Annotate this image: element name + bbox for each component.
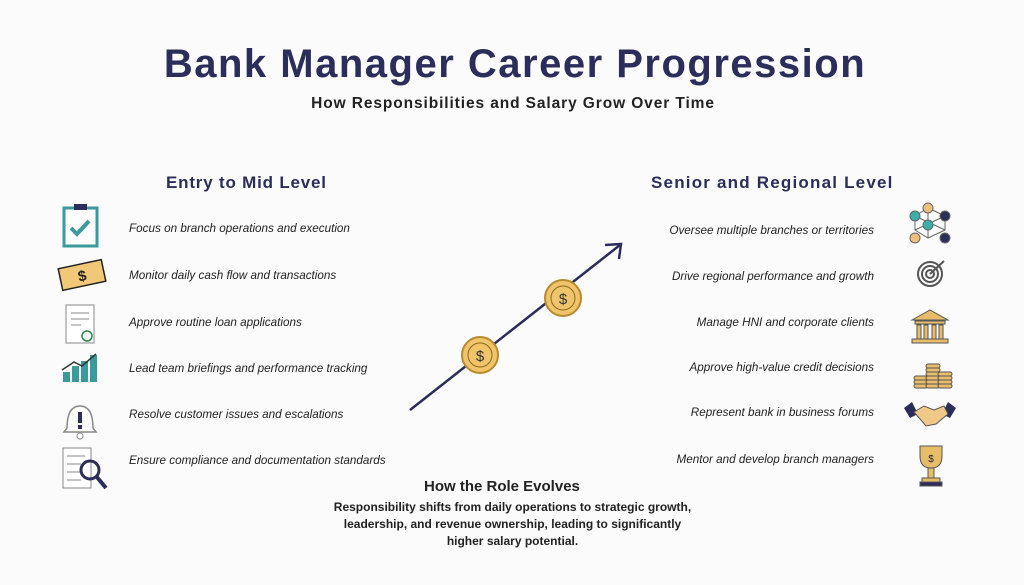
icon: bell	[64, 406, 96, 439]
right text items: Oversee multiple branches or territories	[669, 224, 874, 237]
coin 1: $	[476, 348, 485, 365]
heading: senior: Senior and Regional Level	[651, 173, 894, 192]
icon: network	[910, 203, 950, 243]
icon: growth chart	[62, 354, 97, 382]
left text items: Ensure compliance and documentation standards	[129, 454, 386, 467]
evolves text: Responsibility shifts from daily operations to strategic growth, leadership, and revenue ownership, leading to significantly higher salary potential.	[334, 500, 691, 548]
coin 2: $	[559, 291, 568, 308]
icon: trophy: $	[928, 454, 934, 465]
icon: coins	[914, 364, 952, 388]
icon: cash	[58, 260, 106, 290]
title: Bank Manager Career Progression	[164, 42, 866, 86]
left text items: Monitor daily cash flow and transactions	[129, 269, 336, 282]
subtitle: How Responsibilities and Salary Grow Over Time	[311, 95, 715, 112]
right text items: Represent bank in business forums	[691, 406, 874, 419]
heading: entry: Entry to Mid Level	[166, 173, 327, 192]
icon: bank	[912, 310, 948, 343]
right text items: Mentor and develop branch managers	[676, 453, 874, 466]
right text items	[669, 224, 874, 466]
left text items: Resolve customer issues and escalations	[129, 408, 343, 421]
icon: checklist magnifier	[63, 448, 106, 488]
evolves heading: How the Role Evolves	[424, 478, 580, 495]
icon: target	[918, 261, 944, 286]
right text items: Approve high-value credit decisions	[689, 361, 874, 374]
icon: document	[66, 305, 94, 343]
icon: handshake	[904, 402, 956, 426]
coin 1	[462, 337, 498, 373]
coin 2	[545, 280, 581, 316]
left text items: Focus on branch operations and execution	[129, 222, 350, 235]
left text items: Lead team briefings and performance tracking	[129, 362, 367, 375]
left text items	[128, 222, 386, 467]
icon: clipboard	[64, 204, 97, 246]
icon: trophy	[920, 446, 942, 486]
left text items: Approve routine loan applications	[129, 316, 302, 329]
icon: cash: $	[76, 267, 89, 286]
right text items: Manage HNI and corporate clients	[697, 316, 874, 329]
left icons	[57, 204, 108, 490]
right text items: Drive regional performance and growth	[672, 270, 874, 283]
right icons	[904, 202, 956, 486]
arrow	[409, 242, 622, 411]
